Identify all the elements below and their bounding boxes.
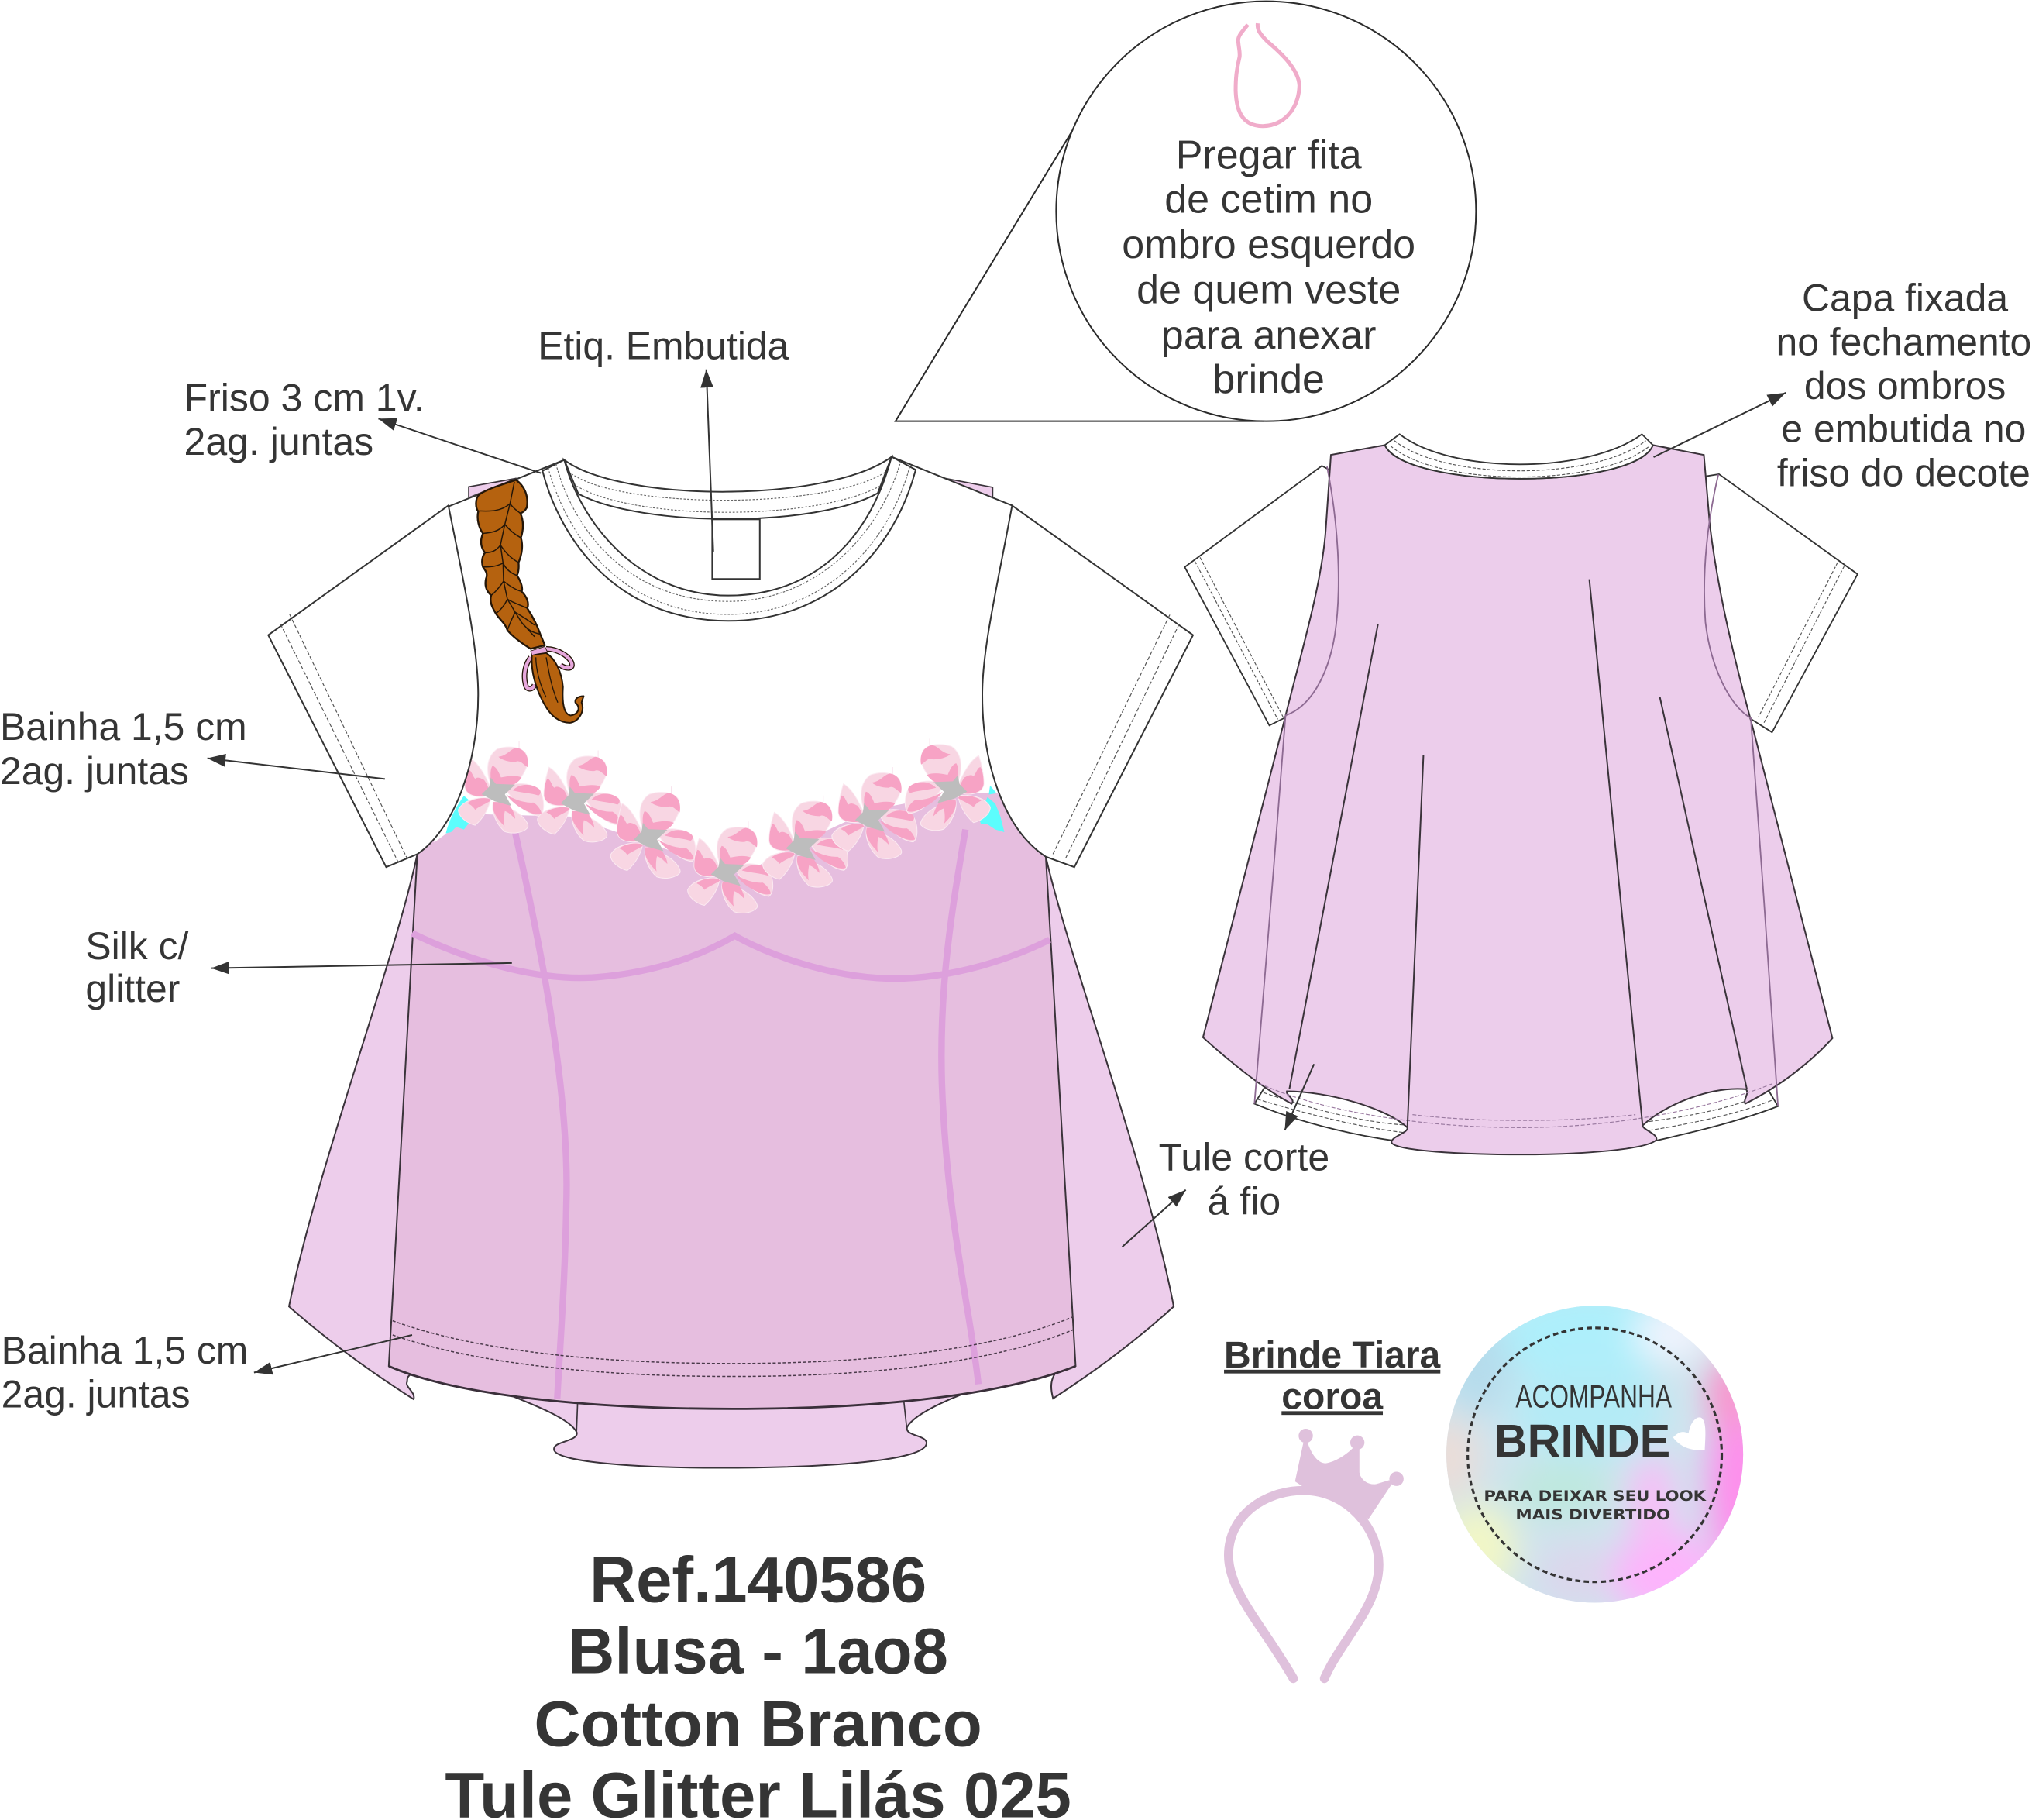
label: Capa fixada: friso do decote	[1777, 451, 2030, 494]
label: Capa fixada: e embutida no	[1781, 407, 2026, 450]
plait body	[476, 480, 545, 649]
white bodice	[434, 457, 1012, 871]
braid	[476, 480, 583, 723]
see-through shirt lines	[1254, 466, 1778, 1106]
label: Capa fixada: Capa fixada	[1802, 276, 2008, 319]
callout circle with pointer	[896, 2, 1476, 421]
icon: heart	[1673, 1417, 1705, 1450]
back garment	[1184, 434, 1858, 1154]
label: Silk c/ glitter: glitter	[85, 967, 180, 1010]
callout text	[1122, 132, 1415, 402]
heading: brinde tiara: coroa	[1281, 1376, 1383, 1417]
tail seams	[576, 1396, 906, 1433]
badge gradient disc	[1446, 1306, 1743, 1602]
label: Capa fixada: no fechamento	[1776, 320, 2031, 363]
cyan flower accents	[445, 786, 1004, 834]
title block: Blusa - 1ao8	[568, 1615, 948, 1688]
callout text: para anexar	[1161, 313, 1377, 358]
neck label tag	[712, 519, 760, 579]
gift badge: BRINDE	[1494, 1415, 1670, 1467]
badge dashed ring	[1468, 1328, 1722, 1582]
back left sleeve	[1184, 466, 1348, 725]
plait creases	[479, 482, 540, 637]
icon: satin ribbon loop	[1236, 23, 1299, 126]
heading: brinde tiara: Brinde Tiara	[1224, 1335, 1441, 1376]
silk glitter lines	[412, 830, 1050, 1399]
tule cape front	[289, 854, 1174, 1467]
back hem stitches	[1257, 1092, 1772, 1138]
shoulder seam lines	[449, 457, 1012, 507]
see-through hem stitch	[1260, 1083, 1772, 1127]
title block: Ref.140586	[590, 1544, 927, 1616]
ribbon loops	[524, 649, 572, 689]
neck rib	[542, 457, 916, 621]
callout text: ombro esquerdo	[1122, 222, 1415, 267]
body hem heavier line	[389, 1366, 1075, 1409]
label: Bainha hem: 2ag. juntas	[2, 1373, 191, 1416]
icon: tiara crown	[1229, 1429, 1404, 1678]
pleat lines	[1289, 580, 1747, 1127]
title block: Cotton Branco	[534, 1688, 982, 1760]
shoulder pieces	[469, 478, 992, 508]
gift badge: PARA DEIXAR SEU LOOK	[1484, 1488, 1707, 1505]
flower garland	[459, 738, 990, 913]
label: Bainha hem: Bainha 1,5 cm	[2, 1329, 248, 1372]
callout text: brinde	[1212, 357, 1325, 402]
label: Etiq. Embutida: Etiq. Embutida	[538, 324, 789, 367]
hem stitching	[393, 1317, 1073, 1377]
label: Silk c/ glitter: Silk c/	[85, 924, 188, 968]
callout text: de quem veste	[1136, 267, 1401, 312]
label: Friso: Friso 3 cm 1v.	[184, 376, 425, 419]
circle	[1056, 2, 1476, 421]
back right sleeve	[1685, 474, 1858, 732]
gift badge: MAIS DIVERTIDO	[1515, 1507, 1670, 1523]
hair tail	[531, 653, 583, 723]
pointer	[896, 129, 1264, 421]
callout text: de cetim no	[1164, 177, 1373, 222]
label: Bainha sleeve: 2ag. juntas	[0, 749, 189, 793]
label: Friso: 2ag. juntas	[184, 420, 373, 463]
label: Tule corte: á fio	[1208, 1179, 1281, 1223]
gift badge	[1446, 1306, 1743, 1602]
label: Bainha sleeve: Bainha 1,5 cm	[0, 705, 247, 748]
callout text: Pregar fita	[1176, 132, 1362, 177]
badge text: ACOMPANHA	[1515, 1378, 1672, 1415]
back shirt hem	[1254, 1037, 1778, 1141]
back collar	[1385, 434, 1653, 479]
back cape panel	[1203, 445, 1832, 1154]
front garment	[268, 457, 1193, 1467]
ribbon band	[531, 646, 548, 655]
label: Capa fixada: dos ombros	[1804, 364, 2006, 408]
right sleeve	[982, 505, 1193, 867]
body panel	[389, 765, 1075, 1409]
sleeve stitches	[280, 614, 1179, 862]
back sleeve stitches	[1195, 557, 1844, 723]
label: Tule corte: Tule corte	[1159, 1136, 1329, 1179]
left sleeve	[268, 505, 478, 867]
annotation arrows	[208, 370, 1786, 1373]
